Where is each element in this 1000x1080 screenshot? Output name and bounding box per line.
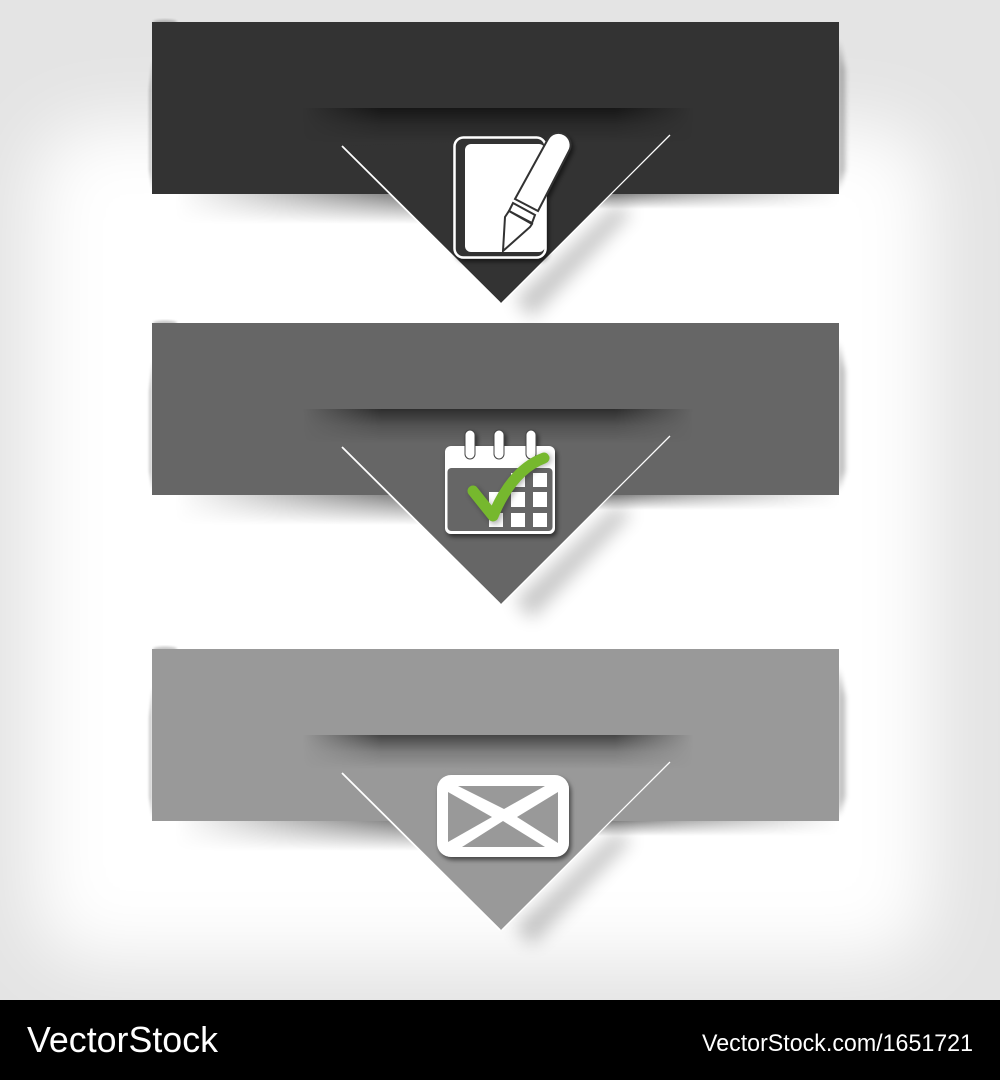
pointer edge lines — [342, 762, 670, 930]
pointer edge lines — [342, 436, 670, 604]
image reference: VectorStock.com/1651721 — [702, 1030, 973, 1057]
banner bar — [152, 22, 839, 194]
banner shadows — [149, 20, 845, 318]
panel: medium banner with calendar icon — [149, 320, 845, 619]
panel: dark banner with notepad icon — [149, 20, 845, 318]
brand name: VectorStock — [27, 1019, 219, 1060]
panel: light banner with envelope icon — [149, 646, 845, 945]
footer bar — [0, 1000, 1000, 1080]
triangle pointer — [342, 135, 670, 303]
fold slit shadow — [314, 409, 682, 436]
banner shadows — [149, 646, 845, 945]
icon: envelope — [437, 775, 569, 857]
banner bar — [152, 649, 839, 821]
triangle pointer — [342, 762, 670, 930]
banner shadows — [149, 320, 845, 619]
fold slit shadow — [310, 735, 686, 764]
icon: notepad and pen — [454, 133, 571, 258]
triangle pointer — [342, 436, 670, 604]
banner bar — [152, 323, 839, 495]
pointer edge lines — [342, 135, 670, 303]
fold slit shadow — [326, 108, 670, 127]
icon: calendar with check mark — [445, 430, 555, 534]
